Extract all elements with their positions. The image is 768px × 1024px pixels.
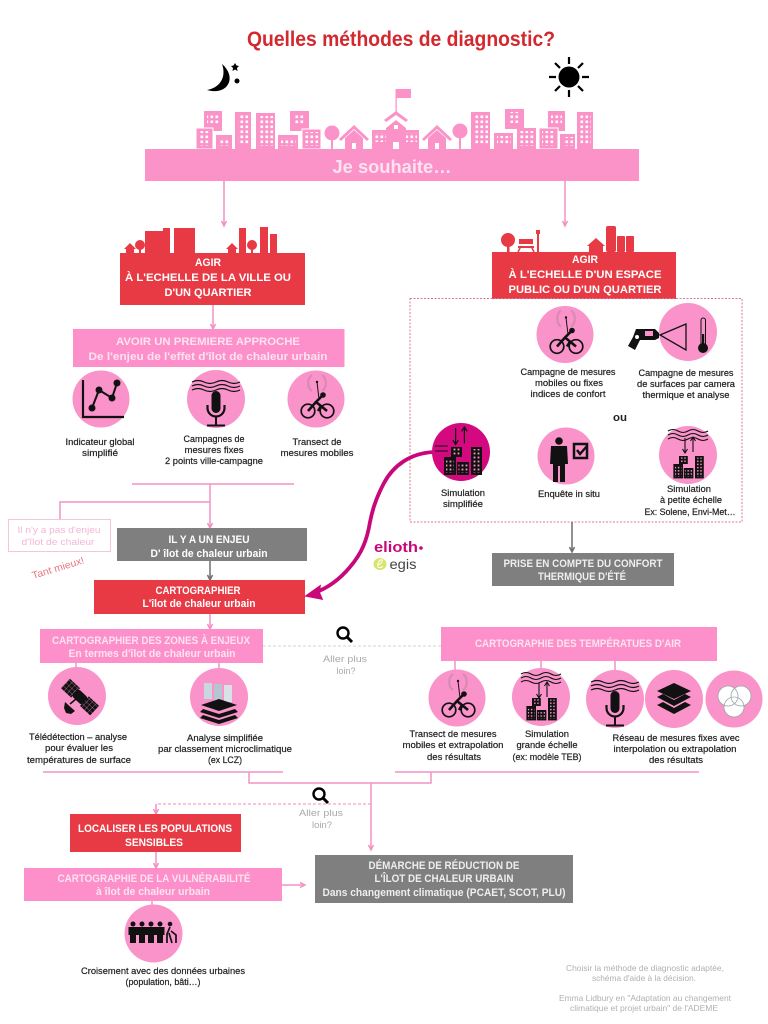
- title: Quelles méthodes de diagnostic?: [247, 28, 555, 51]
- icon: moon and stars: [207, 63, 240, 91]
- arrow: map to zones: [208, 614, 212, 629]
- label: go further upper: [323, 654, 368, 676]
- panel: act at public space scale: [492, 252, 676, 299]
- city skyline: [196, 89, 593, 149]
- logo: elioth egis: [374, 539, 423, 572]
- panel: map the heat island: L'îlot de chaleur urbain: [142, 598, 256, 610]
- icon: person survey with checkbox: [538, 428, 594, 484]
- label: transect and extrapolation: des résultats: [427, 752, 482, 762]
- panel: act at public space scale: PUBLIC OU D'UN QUARTIER: [508, 284, 662, 296]
- label: urban data crossing: [81, 966, 246, 987]
- label: mobile comfort campaign: mobiles ou fixes: [535, 378, 604, 388]
- panel: first approach: [73, 329, 344, 367]
- icon: line chart indicator: [72, 370, 130, 428]
- label: transect and extrapolation: [402, 729, 504, 762]
- panel: reduction approach: DÉMARCHE DE RÉDUCTION DE: [368, 859, 520, 872]
- icon: microphone fixed stations: [187, 370, 245, 428]
- label: simplified analysis: (ex LCZ): [208, 755, 242, 765]
- panel: reduction approach: Dans changement climatique (PCAET, SCOT, PLU): [322, 887, 566, 899]
- connector: go further dashed lower: [156, 803, 371, 805]
- label: small scale simulation: [644, 484, 736, 517]
- footer: caption and credit: schéma d'aide à la décision.: [592, 973, 696, 983]
- logo: elioth egis: egis: [390, 556, 416, 572]
- label: simplified simulation: [441, 488, 485, 509]
- panel: dotted methods frame: [410, 298, 742, 522]
- panel: locate sensitive populations: SENSIBLES: [125, 837, 183, 849]
- arrow: issue to map: [208, 561, 212, 580]
- icon: bicycle transect: [288, 370, 344, 428]
- panel: there is an issue: IL Y A UN ENJEU: [168, 534, 250, 546]
- panel: act at city scale: D'UN QUARTIER: [164, 287, 252, 299]
- banner: Je souhaite: Je souhaite…: [332, 157, 452, 177]
- connector: result of first approach: [60, 484, 294, 528]
- connector: go further dashed: [263, 645, 441, 647]
- panel: first approach: De l'enjeu de l'effet d'îlot de chaleur urbain: [88, 351, 328, 363]
- label: small scale simulation: Ex: Solene, Envi-Met…: [644, 507, 736, 517]
- label: fixed network: [612, 733, 740, 765]
- panel: act at city scale: AGIR: [195, 257, 221, 269]
- label: global indicator: [66, 437, 134, 458]
- label: remote sensing: Télédétection – analyse: [29, 732, 127, 742]
- label: urban data crossing: Croisement avec des données urbaines: [81, 966, 246, 976]
- label: large scale simulation: (ex: modèle TEB): [512, 752, 582, 762]
- arrow: populations to vulnerability: [154, 852, 158, 868]
- arrow: vulnerability to reduction: [282, 882, 305, 888]
- label: mobile comfort campaign: [520, 367, 616, 399]
- label: surface thermal camera campaign: [637, 368, 735, 400]
- label: remote sensing: températures de surface: [27, 755, 131, 765]
- panel: summer thermal comfort: [492, 553, 674, 586]
- label: fixed measurement campaigns: 2 points ville-campagne: [165, 456, 263, 466]
- panel: there is an issue: [117, 528, 307, 561]
- label: small scale simulation: Simulation: [667, 484, 711, 494]
- label: surface thermal camera campaign: thermique et analyse: [642, 390, 730, 400]
- label: urban data crossing: (population, bâti…): [126, 977, 200, 987]
- label: simplified analysis: Analyse simplifiée: [187, 733, 263, 743]
- panel: act at public space scale: À L'ECHELLE D'UN ESPACE: [508, 268, 662, 281]
- panel: reduction approach: L'ÎLOT DE CHALEUR URBAIN: [374, 872, 514, 885]
- label: fixed network: interpolation ou extrapolation: [614, 744, 736, 754]
- label: go further lower: [299, 808, 344, 830]
- label: or: ou: [613, 412, 627, 424]
- panel: reduction approach: [315, 855, 573, 903]
- icon: magnifier lower: [314, 788, 328, 803]
- panel: vulnerability map: CARTOGRAPHIE DE LA VULNÉRABILITÉ: [58, 872, 250, 885]
- banner: Je souhaite: [145, 149, 639, 181]
- connector: vulnerability to people icon: [151, 901, 153, 906]
- label: fixed network: des résultats: [649, 755, 704, 765]
- panel: air temperature map: [441, 627, 717, 661]
- label: remote sensing: [27, 732, 131, 765]
- panel: summer thermal comfort: PRISE EN COMPTE DU CONFORT: [504, 558, 663, 570]
- label: go further lower: loin?: [312, 820, 332, 830]
- panel: act at city scale: À L'ECHELLE DE LA VILLE OU: [125, 271, 291, 284]
- icon: venn circles: [706, 670, 762, 728]
- curved arrow: simplified simulation to map: [306, 452, 434, 599]
- label: remote sensing: pour évaluer les: [45, 743, 114, 753]
- label: simplified analysis: [158, 733, 292, 765]
- panel: vulnerability map: à îlot de chaleur urbain: [96, 886, 210, 898]
- note: tant mieux: Tant mieux!: [31, 555, 86, 582]
- panel: locate sensitive populations: [70, 814, 241, 852]
- panel: map the heat island: [94, 580, 305, 614]
- arrow: city scale to first approach: [210, 305, 216, 329]
- label: simplified simulation: Simulation: [441, 488, 485, 498]
- footer: caption and credit: Emma Lidbury en "Adaptation au changement: [559, 993, 732, 1003]
- label: fixed measurement campaigns: Campagnes de: [184, 434, 244, 444]
- icon: sun: [549, 57, 589, 97]
- label: surface thermal camera campaign: de surfaces par camera: [637, 379, 735, 389]
- callout: no heat island issue: d'îlot de chaleur: [22, 537, 94, 547]
- panel: map issue zones: CARTOGRAPHIER DES ZONES À ENJEUX: [52, 634, 251, 647]
- icon: simplified simulation: [432, 423, 490, 481]
- label: in situ survey: Enquête in situ: [538, 489, 600, 499]
- panel: summer thermal comfort: THERMIQUE D'ÉTÉ: [538, 570, 626, 583]
- callout: no heat island issue: [8, 520, 110, 552]
- icon: data layers: [645, 670, 703, 728]
- icon: satellite: [48, 667, 106, 725]
- label: simplified simulation: simplifiée: [443, 499, 483, 509]
- label: go further upper: Aller plus: [323, 654, 368, 664]
- label: mobile transect: mesures mobiles: [280, 448, 354, 458]
- connectors: zones to icons: [76, 663, 219, 672]
- panel: air temperature map: CARTOGRAPHIE DES TEMPÉRATUES D'AIR: [475, 637, 681, 650]
- label: large scale simulation: Simulation: [525, 729, 569, 739]
- icon: magnifier upper: [338, 628, 352, 642]
- icon: climate zone layers: [190, 668, 248, 726]
- connector: merge lines: [43, 772, 699, 850]
- label: small scale simulation: à petite échelle: [660, 495, 722, 505]
- label: mobile comfort campaign: indices de confort: [530, 389, 606, 399]
- panel: there is an issue: D' îlot de chaleur urbain: [150, 548, 268, 560]
- panel: map issue zones: [40, 629, 263, 663]
- label: transect and extrapolation: Transect de mesures: [410, 729, 497, 739]
- panel: vulnerability map: [24, 868, 282, 901]
- icon: group of people: [124, 904, 182, 962]
- label: large scale simulation: grande échelle: [516, 740, 578, 750]
- footer: caption and credit: Choisir la méthode de diagnostic adaptée,: [566, 963, 724, 973]
- arrow: methods to summer comfort: [570, 522, 574, 552]
- footer: caption and credit: [559, 963, 732, 1013]
- arrow: banner to public space scale: [562, 181, 568, 226]
- label: go further upper: loin?: [336, 666, 356, 676]
- callout: no heat island issue: Il n'y a pas d'enjeu: [18, 525, 100, 535]
- skyline: public space scale: [501, 226, 634, 252]
- skyline: city scale: [124, 227, 277, 253]
- panel: locate sensitive populations: LOCALISER LES POPULATIONS: [78, 823, 232, 835]
- label: global indicator: simplifié: [82, 448, 118, 458]
- label: simplified analysis: par classement microclimatique: [158, 744, 292, 754]
- arrow: go further to populations: [154, 804, 158, 814]
- panel: act at city scale: [120, 253, 305, 305]
- label: go further lower: Aller plus: [299, 808, 344, 818]
- label: fixed network: Réseau de mesures fixes avec: [612, 733, 740, 743]
- arrow: banner to city scale: [222, 181, 226, 226]
- panel: map issue zones: En termes d'îlot de chaleur urbain: [68, 648, 236, 660]
- label: mobile transect: Transect de: [292, 437, 342, 447]
- icon: thermal camera and thermometer: [628, 303, 717, 361]
- panel: first approach: AVOIR UN PREMIERE APPROCHE: [116, 336, 300, 348]
- label: surface thermal camera campaign: Campagne de mesures: [638, 368, 734, 378]
- icon: large scale simulation: [512, 668, 570, 726]
- icon: small scale simulation: [659, 426, 717, 484]
- panel: map the heat island: CARTOGRAPHIER: [156, 585, 241, 597]
- label: fixed measurement campaigns: mesures fixes: [184, 445, 244, 455]
- icon: microphone fixed network: [586, 670, 644, 728]
- label: mobile transect: [280, 437, 354, 458]
- logo: elioth egis: elioth: [374, 539, 418, 556]
- label: large scale simulation: [512, 729, 582, 762]
- label: fixed measurement campaigns: [165, 434, 263, 466]
- icon: bicycle comfort measures: [536, 306, 594, 363]
- label: mobile comfort campaign: Campagne de mesures: [520, 367, 616, 377]
- icon: bicycle transect extrapolation: [428, 670, 486, 726]
- footer: caption and credit: climatique et projet urbain" de l'ADEME: [570, 1003, 718, 1013]
- label: transect and extrapolation: mobiles et extrapolation: [402, 740, 504, 750]
- panel: act at public space scale: AGIR: [572, 254, 598, 266]
- label: global indicator: Indicateur global: [66, 437, 134, 447]
- connectors: air map to icons: [455, 661, 615, 672]
